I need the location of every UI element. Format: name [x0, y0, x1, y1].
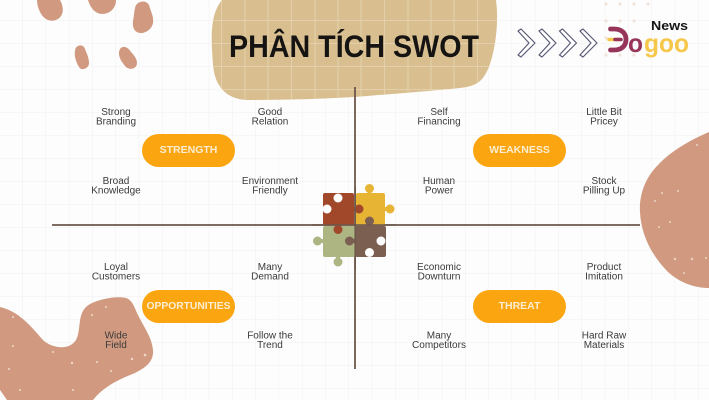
title background blob — [212, 0, 497, 100]
labels: threat: Product — [587, 262, 621, 273]
labels: strength: Branding — [96, 116, 136, 128]
labels: strength: Broad — [103, 176, 129, 187]
pill: opportunities — [142, 290, 235, 323]
icon: chevron arrows — [518, 29, 597, 57]
logo: Dogoo News: o — [628, 28, 643, 58]
labels: threat: Hard Raw — [582, 330, 627, 342]
pill: strength — [142, 134, 235, 167]
labels: strength: Knowledge — [91, 186, 141, 196]
labels: opportunities: Wide — [105, 330, 128, 342]
labels: strength: Relation — [252, 116, 288, 128]
labels: opportunities: Demand — [251, 272, 289, 282]
labels: strength: Environment — [242, 176, 298, 187]
labels: strength: Good — [258, 107, 282, 118]
labels: strength — [91, 107, 298, 196]
pill: weakness — [473, 134, 566, 167]
labels: opportunities: Customers — [92, 272, 140, 282]
labels: opportunities: Loyal — [104, 262, 128, 273]
puzzle piece: red — [322, 193, 364, 234]
labels: weakness: Power — [425, 186, 454, 196]
logo: Dogoo News: goo — [644, 28, 689, 58]
icon: puzzle — [312, 184, 396, 270]
labels: weakness: Little Bit — [586, 107, 622, 118]
pill: threat: THREAT — [499, 300, 541, 312]
labels: threat: Economic — [417, 262, 461, 273]
title: PHÂN TÍCH SWOT — [229, 28, 479, 64]
decorative blobs: top left — [37, 0, 153, 69]
labels: strength: Friendly — [252, 186, 288, 196]
labels: weakness: Self — [430, 107, 448, 118]
labels: opportunities: Many — [258, 262, 282, 273]
puzzle piece: green — [313, 226, 355, 266]
pill: weakness: WEAKNESS — [489, 144, 550, 156]
labels: threat: Downturn — [418, 272, 460, 282]
decorative blob: right — [640, 132, 709, 288]
labels: strength: Strong — [101, 107, 131, 118]
logo: Dogoo News — [604, 2, 689, 58]
labels: opportunities: Field — [105, 340, 127, 351]
pill: strength: STRENGTH — [160, 144, 217, 156]
labels: weakness — [417, 107, 626, 196]
puzzle piece: yellow — [356, 184, 394, 225]
decorative blob: bottom left — [0, 297, 153, 400]
labels: threat — [412, 262, 627, 351]
labels: opportunities: Trend — [257, 340, 283, 351]
labels: weakness: Financing — [417, 116, 461, 128]
pill: threat — [473, 290, 566, 323]
labels: threat: Competitors — [412, 340, 466, 351]
labels: opportunities — [92, 262, 293, 351]
puzzle piece: brown — [345, 216, 386, 257]
labels: threat: Materials — [584, 340, 624, 351]
labels: threat: Many — [427, 330, 451, 342]
title grid overlay — [212, 0, 497, 100]
logo: Dogoo News: News — [651, 18, 688, 33]
labels: opportunities: Follow the — [247, 330, 293, 342]
labels: threat: Imitation — [585, 272, 623, 282]
labels: weakness: Pricey — [590, 116, 618, 128]
labels: weakness: Stock — [591, 176, 618, 187]
labels: weakness: Pilling Up — [583, 186, 626, 196]
axis lines — [52, 87, 640, 369]
pill: opportunities: OPPORTUNITIES — [146, 300, 230, 312]
labels: weakness: Human — [423, 176, 455, 187]
